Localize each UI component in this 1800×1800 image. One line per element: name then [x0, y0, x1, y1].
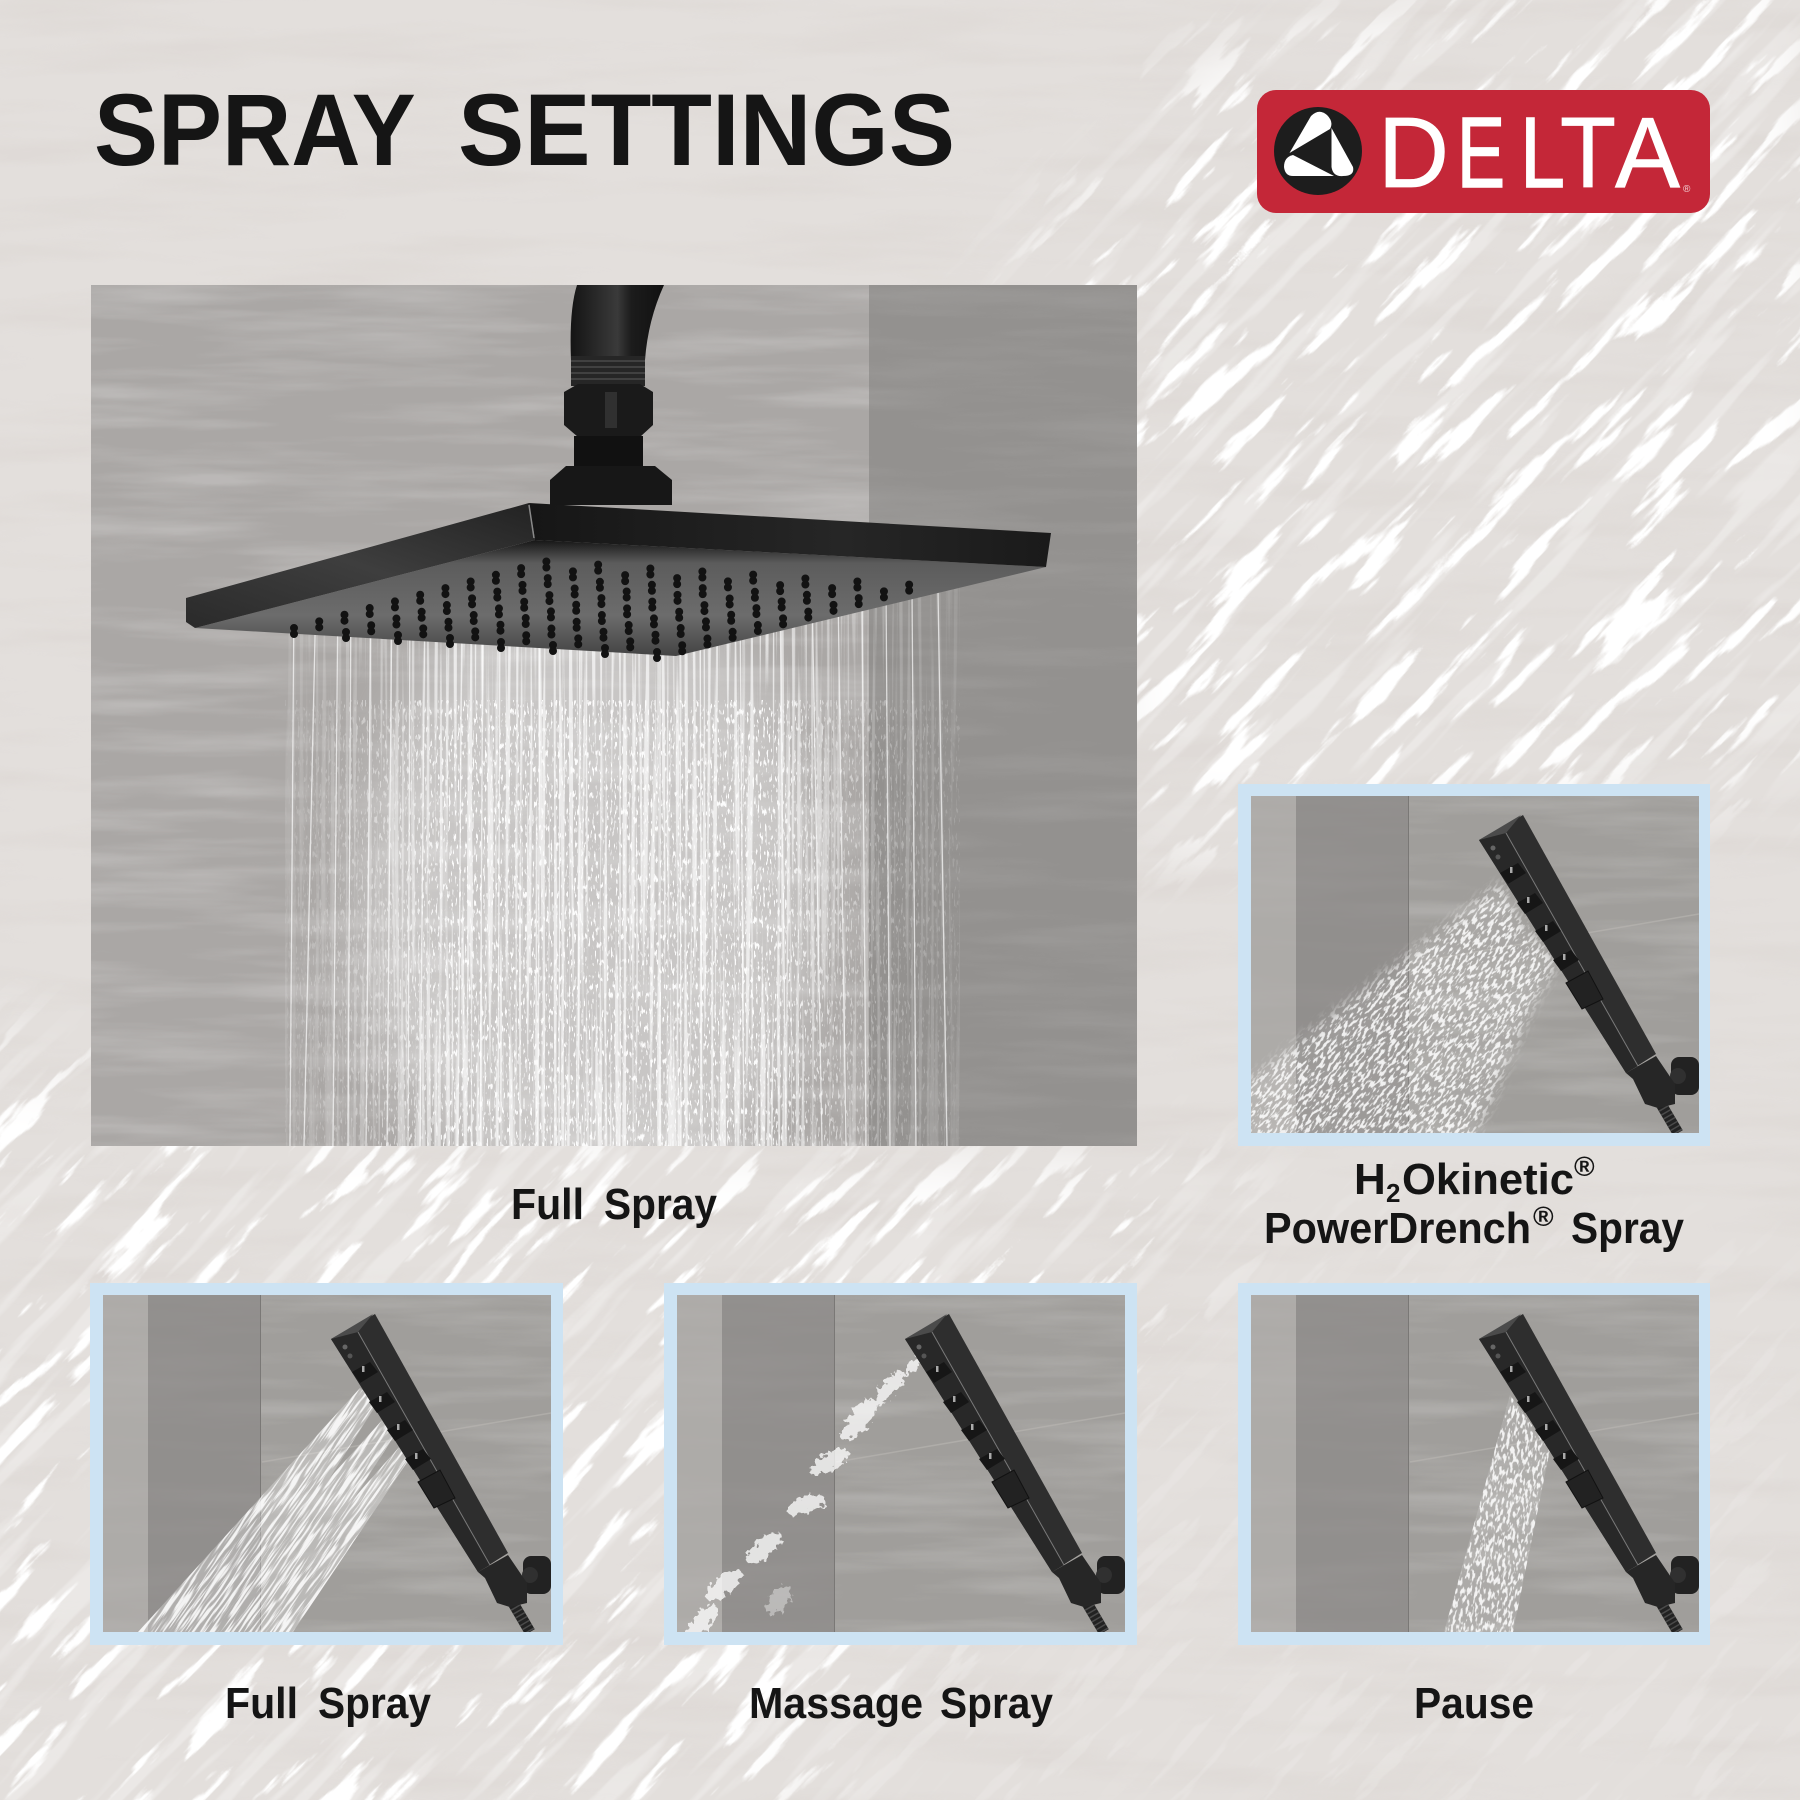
label: Pause: Pause [1414, 1679, 1534, 1728]
label: H2Okinetic PowerDrench Spray [1264, 1151, 1684, 1253]
registered mark: ® [1683, 184, 1691, 195]
panel: handshower full spray [90, 1283, 563, 1645]
label: Full Spray (main): Full [511, 1180, 584, 1229]
wordmark: D [1378, 97, 1449, 209]
shower arm [550, 285, 672, 505]
panel: main rain shower photo [91, 285, 1137, 1220]
shower head [186, 503, 1051, 658]
spray: wide droplets [1251, 880, 1560, 1133]
label: Full Spray (main): Spray [604, 1180, 717, 1229]
label: H2Okinetic PowerDrench Spray: Okinetic [1402, 1155, 1574, 1204]
panel: pause [1238, 1283, 1710, 1645]
icon: Delta triangle mark [1274, 107, 1362, 195]
wall [91, 285, 1137, 1146]
title: SPRAY [94, 73, 415, 187]
label: Massage Spray: Spray [940, 1679, 1053, 1728]
left edge face [186, 503, 535, 628]
spray: pulsing blobs [681, 1346, 931, 1645]
title: SETTINGS [458, 73, 955, 187]
spray: trickle droplets [1251, 1295, 1699, 1632]
wordmark [1378, 97, 1680, 209]
logo: Delta [1257, 90, 1710, 213]
panel: H2Okinetic PowerDrench spray [1238, 784, 1710, 1146]
falling water [285, 588, 960, 1146]
label: H2Okinetic PowerDrench Spray: ® [1574, 1151, 1595, 1182]
wordmark: A [1615, 97, 1680, 209]
wordmark: E [1457, 97, 1505, 209]
label: Full Spray: Spray [318, 1679, 431, 1728]
label: H2Okinetic PowerDrench Spray: ® [1533, 1201, 1554, 1232]
label: H2Okinetic PowerDrench Spray: PowerDrench [1264, 1204, 1531, 1253]
right edge face [529, 503, 1051, 567]
label: Full Spray: Full [225, 1679, 298, 1728]
label: H2Okinetic PowerDrench Spray: H [1354, 1155, 1386, 1204]
wordmark: L [1520, 97, 1565, 209]
label: H2Okinetic PowerDrench Spray: 2 [1386, 1178, 1400, 1208]
wordmark: T [1560, 97, 1616, 209]
underside with nozzles [195, 540, 1046, 658]
spray: three jets [138, 1388, 408, 1632]
label: Massage Spray: Massage [749, 1679, 923, 1728]
label: H2Okinetic PowerDrench Spray: Spray [1571, 1204, 1684, 1253]
panel: massage spray [664, 1283, 1137, 1645]
